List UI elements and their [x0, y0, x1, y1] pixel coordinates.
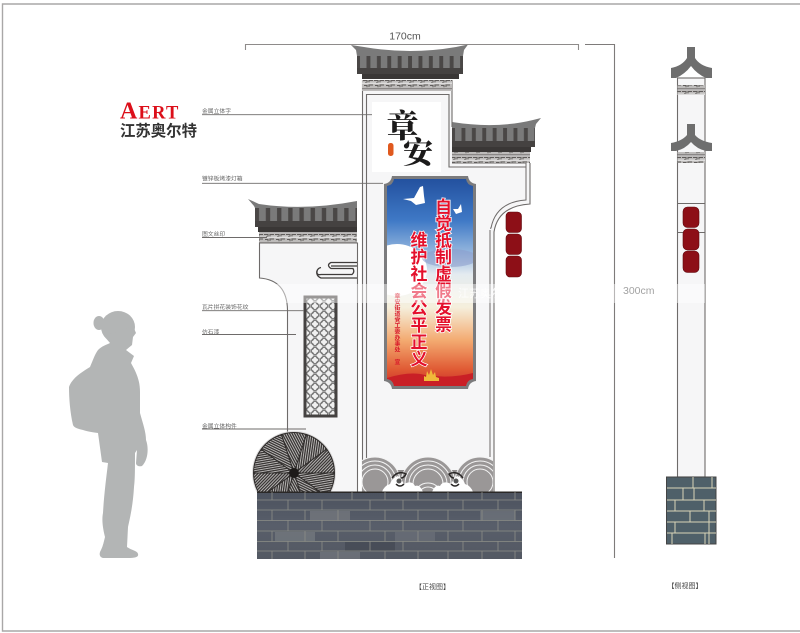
dimension: height 300cm [585, 44, 655, 558]
stone brick base [257, 492, 522, 559]
slogan: 自觉抵制虚假发票: 自觉抵制虚假发票 [432, 197, 452, 332]
main pattern band [362, 80, 452, 91]
caption: 侧视图: 【侧视图】 [668, 581, 702, 590]
name plate: 章安: 章 [386, 101, 419, 147]
watermark band [78, 284, 705, 303]
callout: 图文丝印: 图文丝印 [202, 230, 225, 238]
right wing wall [452, 118, 541, 492]
left wing roof [248, 199, 357, 232]
watermark band: 江苏奥尔特 [168, 286, 223, 300]
logo: AERT 江苏奥尔特: AERT [120, 98, 180, 124]
lattice window [305, 297, 336, 416]
name plate: 章安: 安 [403, 128, 435, 172]
side view stone base [666, 477, 716, 544]
right wing pattern band [452, 152, 530, 163]
lanterns front view [506, 212, 522, 277]
name plate: 章安 [372, 101, 441, 172]
main roof [351, 44, 468, 79]
caption: 正视图: 【正视图】 [415, 582, 450, 591]
side band upper [678, 85, 705, 95]
main tower wall [351, 44, 526, 492]
scroll pipe decoration [317, 262, 357, 278]
callout: 金属立体构件 [202, 422, 306, 430]
dimension: height 300cm: 300cm [623, 285, 655, 297]
logo: AERT 江苏奥尔特 [120, 98, 197, 140]
callout: 图文丝印 [202, 230, 267, 238]
dimension: width 170cm: 170cm [389, 30, 421, 42]
side roof upper [671, 47, 712, 78]
banner light box [384, 176, 476, 389]
issuer text: 章安街道党工委办事处 [393, 292, 400, 353]
callout: 镀锌板烤漆灯箱: 镀锌板烤漆灯箱 [202, 174, 243, 182]
callout: 金属立体字: 金属立体字 [202, 107, 231, 115]
left wing wall [248, 199, 358, 492]
slogan: 维护社会公平正义: 维护社会公平正义 [408, 231, 427, 367]
watermark band: 江苏奥尔特 [458, 286, 513, 300]
logo: AERT 江苏奥尔特: 江苏奥尔特 [120, 121, 197, 140]
callout: 仿石漆 [202, 328, 296, 336]
side view column [671, 47, 712, 477]
callout: 金属立体构件: 金属立体构件 [202, 422, 237, 430]
side lanterns [683, 207, 699, 272]
callout: 瓦片拼花装饰花纹 [202, 303, 304, 311]
callout: 仿石漆: 仿石漆 [202, 328, 220, 336]
person silhouette [69, 311, 148, 558]
wave decoration [362, 458, 493, 492]
issuer text end mark: 宣 [393, 358, 400, 366]
left wing pattern band [259, 232, 357, 243]
dimension: width 170cm [246, 30, 578, 50]
right wing roof [452, 118, 541, 152]
callout: 瓦片拼花装饰花纹: 瓦片拼花装饰花纹 [202, 303, 249, 311]
side band lower [678, 152, 705, 163]
doves [403, 186, 462, 214]
side roof lower [671, 124, 712, 151]
millstone wheel [252, 431, 336, 492]
